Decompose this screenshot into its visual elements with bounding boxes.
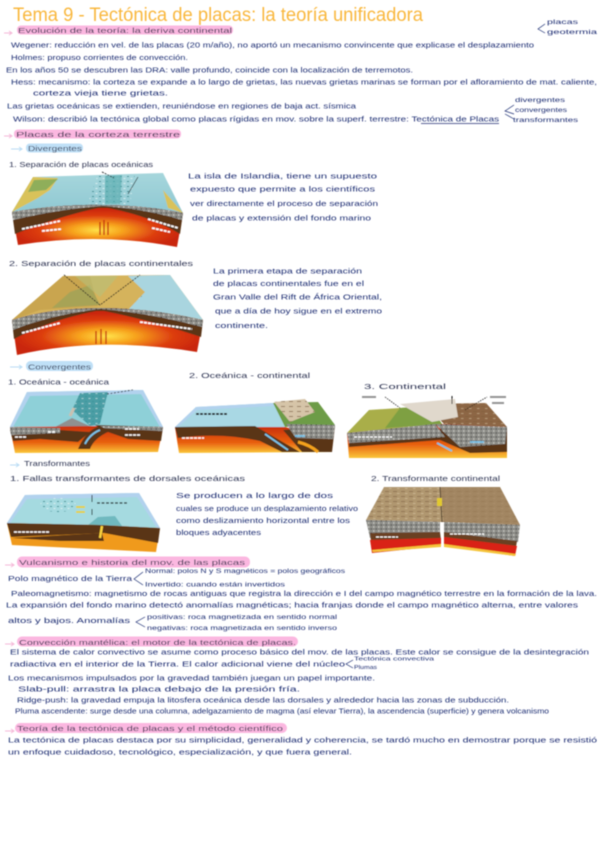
diagram: separación oceánica <box>12 172 183 247</box>
text block: convección: Slab-pull: arrastra la placa debajo de la presión fría. <box>18 684 300 694</box>
text block: conclusión: un enfoque cuidadoso, tecnológico, especialización, y que fuera general. <box>8 748 352 756</box>
text block: Islandia: de placas y extensión del fondo marino <box>192 214 371 222</box>
text block: Gran Valle del Rift: La primera etapa de separación <box>213 266 362 276</box>
text block: Islandia <box>188 172 378 222</box>
text block: fallas: bloques adyacentes <box>176 528 261 537</box>
subheading: divergentes: Divergentes <box>28 144 82 153</box>
section: teoría y método científico <box>5 723 287 733</box>
text block: Gran Valle del Rift: que a día de hoy sigue en el extremo <box>215 306 382 316</box>
text block: Wegener, Holmes, Hess, Wilson: Wilson: describió la tectónica global como placas rígidas en mov. sobre la superf. terrestre: Tectónica de Placas <box>13 114 499 124</box>
text block: Gran Valle del Rift: de placas continentales fue en el <box>213 279 364 288</box>
text block: paleomagnetismo <box>6 589 597 632</box>
text block: Gran Valle del Rift: continente. <box>215 321 268 330</box>
section: vulcanismo: Vulcanismo e historia del mov. de las placas <box>19 558 245 567</box>
text block: convección <box>8 648 589 716</box>
text block: polo magnético: Polo magnético de la Tierra <box>8 574 133 583</box>
heading: transformante continental: 2. Transformante continental <box>371 474 500 483</box>
section: evolución de la teoría <box>4 26 233 35</box>
diagram: separación continental <box>12 275 203 355</box>
section: teoría y método científico: Teoría de la tectónica de placas y el método científico <box>17 724 283 733</box>
text block: Wegener, Holmes, Hess, Wilson <box>6 40 597 124</box>
text block: paleomagnetismo: Paleomagnetismo: magnetismo de rocas antiguas que registra la dirección e I del campo magnético terrestre en la formación de la lava. <box>11 589 597 598</box>
heading: separación de placas oceánicas: 1. Separación de placas oceánicas <box>9 160 153 169</box>
text block: Gran Valle del Rift <box>213 266 382 330</box>
section: vulcanismo <box>5 556 250 568</box>
side note: placas, geotermia <box>538 19 598 36</box>
side note: tipos de límites: convergentes <box>515 107 568 114</box>
diagram: convergente oceánica-continental <box>175 399 335 453</box>
heading: fallas transformantes: 1. Fallas transformantes de dorsales oceánicas <box>10 474 245 483</box>
text block: conclusión: La tectónica de placas destaca por su simplicidad, generalidad y coherencia, se tardó mucho en demostrar porque se resistió <box>8 736 597 744</box>
text block: convección: Pluma ascendente: surge desde una columna, adelgazamiento de magma (así elevar Tierra), la ascendencia (superficie) y genera volcanismo <box>15 706 549 716</box>
text block: convección: Ridge-push: la gravedad empuja la litosfera oceánica desde las dorsales y alrededor hacia las zonas de subducción. <box>17 696 509 704</box>
text block: Wegener, Holmes, Hess, Wilson: Las grietas oceánicas se extienden, reuniéndose en regiones de baja act. sísmica <box>7 102 357 110</box>
text block: Islandia: ver directamente el proceso de separación <box>190 199 378 208</box>
side note: tipos de límites <box>505 97 579 124</box>
text block: Wegener, Holmes, Hess, Wilson: Holmes: propuso corrientes de convección. <box>11 53 188 62</box>
text block: Gran Valle del Rift: Gran Valle del Rift de África Oriental, <box>213 292 382 302</box>
subheading: convergentes <box>10 361 93 372</box>
text block: Wegener, Holmes, Hess, Wilson: Wegener: reducción en vel. de las placas (20 m/año), no aportó un mecanismo convincente que explicase el desplazamiento <box>11 40 534 50</box>
heading: continental: 3. Continental <box>364 382 447 391</box>
text block: fallas <box>176 491 358 537</box>
diagram: transformante continental <box>366 487 520 556</box>
section: convección mantélica <box>5 636 298 647</box>
text block: polo magnético: Normal: polos N y S magnéticos = polos geográficos <box>145 568 346 575</box>
text block: Wegener, Holmes, Hess, Wilson: Hess: mecanismo: la corteza se expande a lo largo de grietas, las nuevas grietas marinas se forman por el afloramiento de mat. caliente, <box>11 78 597 86</box>
subheading: convergentes: Convergentes <box>28 362 91 372</box>
heading: separación de placas continentales: 2. Separación de placas continentales <box>9 259 193 268</box>
section: evolución de la teoría: Evolución de la teoría: la deriva continental <box>18 26 232 35</box>
diagram: fallas transformantes <box>7 493 160 552</box>
text block: convección: El sistema de calor convectivo se asume como proceso básico del mov. de las placas. Este calor se consigue de la desintegración <box>10 648 589 656</box>
diagram: convergente oceánica-oceánica <box>10 390 163 453</box>
diagram: convergente continental <box>347 396 507 458</box>
section: convección mantélica: Convección mantélica: el motor de la tectónica de placas. <box>19 638 296 647</box>
text block: convección: Plumas <box>354 665 377 671</box>
text block: conclusión <box>8 736 597 756</box>
text block: fallas: como deslizamiento horizontal entre los <box>176 516 350 525</box>
text block: polo magnético: Invertido: cuando están invertidos <box>145 582 286 588</box>
text block: Wegener, Holmes, Hess, Wilson: corteza vieja tiene grietas. <box>33 88 168 98</box>
text block: Wegener, Holmes, Hess, Wilson: En los años 50 se descubren las DRA: valle profundo, coincide con la localización de terremotos. <box>6 66 413 74</box>
side note: placas, geotermia: geotermia <box>547 29 598 36</box>
side note: placas, geotermia: placas <box>547 19 579 26</box>
text block: polo magnético <box>8 568 346 588</box>
text block: convección: Los mecanismos impulsados por la gravedad también juegan un papel importante. <box>8 674 375 682</box>
section: placas de la corteza <box>4 130 181 139</box>
text block: fallas: Se producen a lo largo de dos <box>176 491 333 500</box>
text block: convección: Tectónica convectiva <box>354 656 435 662</box>
text block: paleomagnetismo: altos y bajos. Anomalías <box>8 616 130 625</box>
title: Tema 9 - Tectónica de placas: la teoría unificadora <box>13 5 423 26</box>
section: placas de la corteza: Placas de la corteza terrestre <box>16 130 180 139</box>
text block: fallas: cuales se produce un desplazamiento relativo <box>176 504 358 513</box>
text block: convección: radiactiva en el interior de la Tierra. El calor adicional viene del núcleo <box>10 660 345 668</box>
diagrams layer <box>7 172 520 556</box>
text block: paleomagnetismo: La expansión del fondo marino detectó anomalías magnéticas; hacia franjas donde el campo magnético alterna, entre valores <box>6 600 578 610</box>
subheading: divergentes <box>11 144 83 153</box>
subheading: transformantes: Transformantes <box>24 459 90 468</box>
text block: Islandia: expuesto que permite a los científicos <box>190 184 375 194</box>
heading: oceánica-oceánica: 1. Oceánica - oceánica <box>8 378 110 386</box>
text block: paleomagnetismo: positivas: roca magnetizada en sentido normal <box>147 614 338 621</box>
side note: tipos de límites: divergentes <box>515 97 566 104</box>
text block: Islandia: La isla de Islandia, tiene un supuesto <box>188 172 377 180</box>
heading: oceánica-continental: 2. Oceánica - continental <box>189 371 310 380</box>
side note: tipos de límites: transformantes <box>513 117 579 124</box>
subheading: transformantes <box>10 459 90 468</box>
text block: paleomagnetismo: negativas: roca magnetizada en sentido inverso <box>147 625 338 632</box>
